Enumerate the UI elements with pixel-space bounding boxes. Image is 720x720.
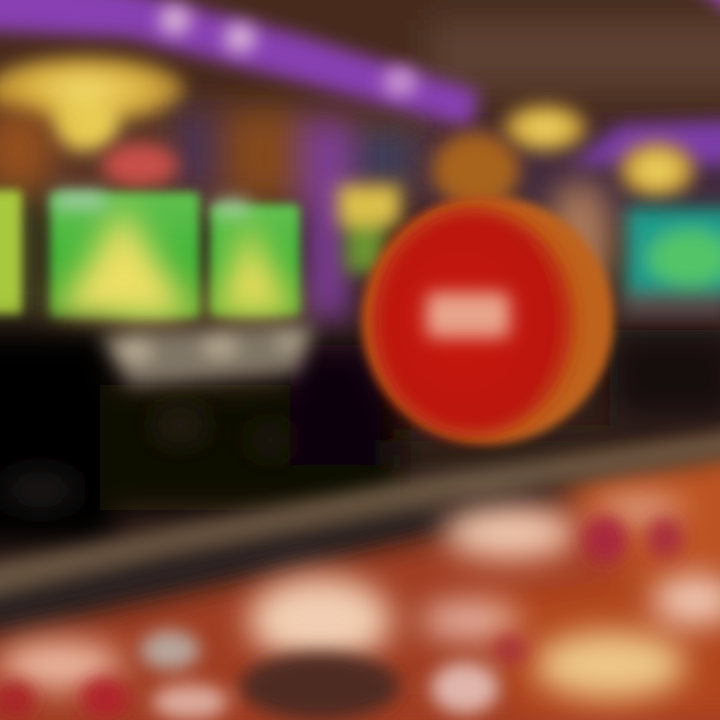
roulette sign bbox=[362, 132, 614, 444]
floor base bbox=[0, 670, 720, 720]
sign face bbox=[372, 208, 572, 436]
sign knob bbox=[432, 132, 520, 208]
right machine screen bbox=[620, 208, 720, 325]
slot machine cabinets bbox=[0, 108, 415, 320]
screen highlights bbox=[55, 205, 298, 318]
sign label bbox=[426, 292, 510, 338]
sign rim bbox=[362, 196, 614, 444]
floor pattern bbox=[0, 496, 720, 699]
aisle walkway bbox=[0, 428, 720, 635]
screen glare bbox=[55, 192, 249, 214]
red sign on cabinet bbox=[102, 143, 178, 187]
machine details in the dark bbox=[0, 411, 292, 504]
ceiling lamps bbox=[0, 56, 695, 198]
floor chips bbox=[0, 516, 683, 720]
sign halo bbox=[546, 180, 614, 300]
ceiling light spots bbox=[159, 5, 417, 97]
floor bbox=[0, 445, 720, 720]
slot machine screens bbox=[0, 190, 300, 318]
purple ceiling band bbox=[0, 0, 720, 165]
upper machine right bbox=[338, 185, 400, 273]
dark lower machines bbox=[0, 330, 720, 545]
ceiling bbox=[0, 0, 720, 220]
machine button panel bbox=[100, 325, 315, 385]
